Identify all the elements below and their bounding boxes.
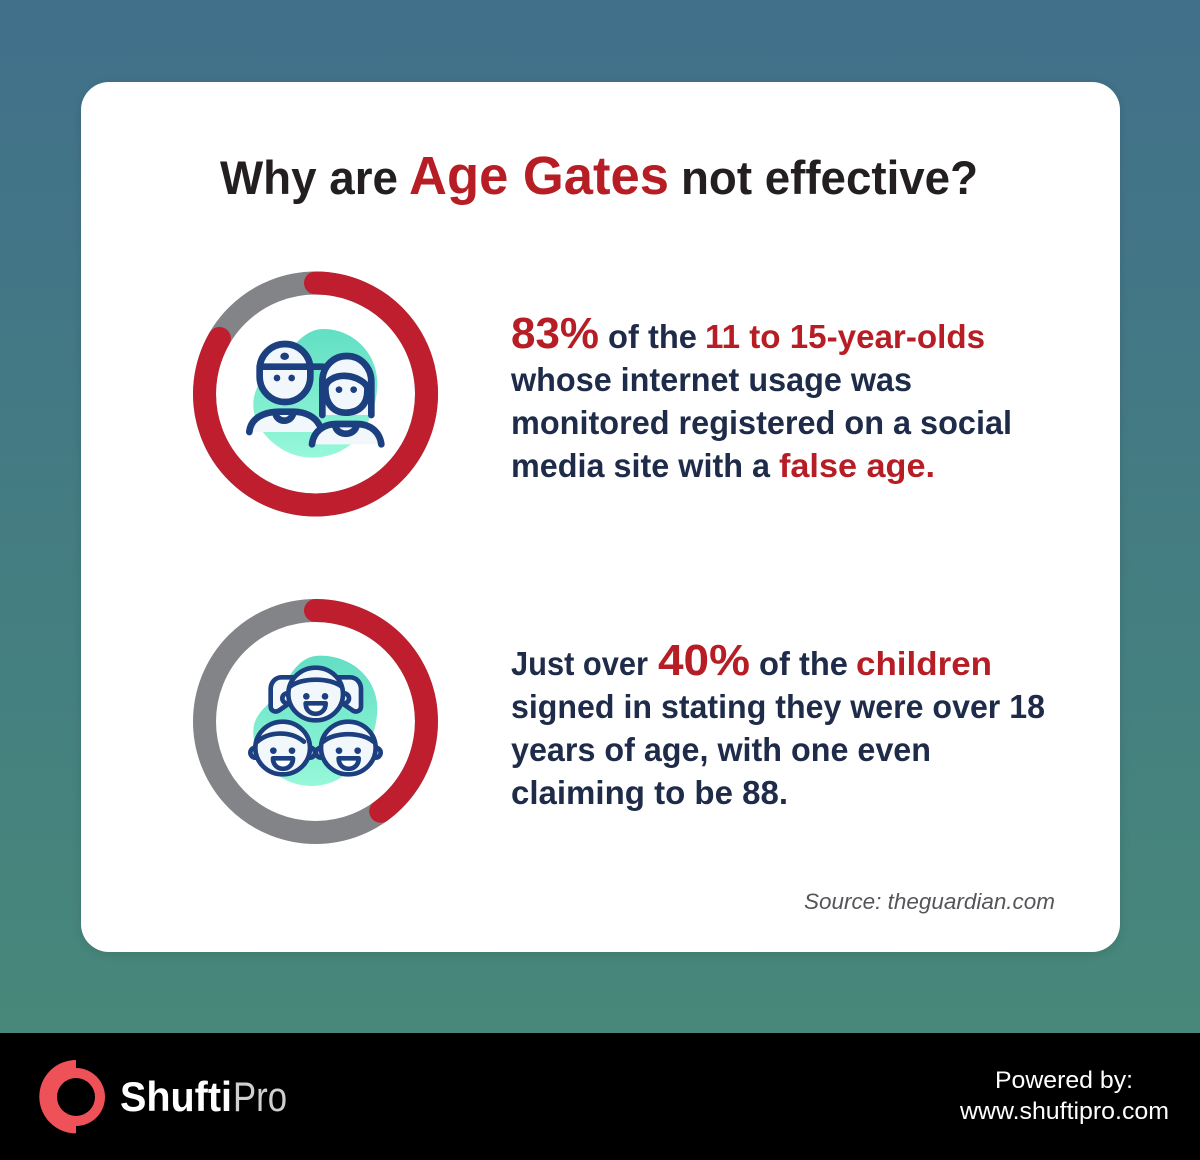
powered by text [959, 1067, 1169, 1125]
title: Why are [220, 151, 398, 204]
statistic text: 83%: 83% [511, 309, 599, 358]
source note: Source: theguardian.com [804, 889, 1055, 914]
statistic text: 40%: of the [759, 645, 848, 682]
donut chart: 40% [204, 610, 426, 832]
statistic text: 40%: years of age, with one even [511, 731, 931, 768]
statistic text: 40%: signed in stating they were over 18 [511, 688, 1045, 725]
statistic text: 40%: 40% [658, 636, 750, 685]
statistic text: 83%: whose internet usage was [510, 361, 912, 398]
donut chart: 83% [204, 283, 427, 505]
footer band [0, 1033, 1200, 1160]
statistic text: 40% [511, 636, 1045, 811]
panel: white card [81, 82, 1120, 952]
powered by text: Powered by: [995, 1067, 1133, 1094]
statistic text: 83%: of the [608, 318, 697, 355]
statistic text: 83%: 11 to 15-year-olds [705, 318, 985, 355]
powered by text: www.shuftipro.com [959, 1098, 1169, 1125]
statistic text: 40%: children [856, 645, 992, 682]
statistic text: 83%: monitored registered on a social [511, 404, 1012, 441]
title: not effective? [681, 151, 978, 204]
statistic text: 83%: false age. [779, 447, 935, 484]
icon: three children [250, 656, 381, 786]
brand name: Shufti [120, 1073, 232, 1120]
statistic text: 83%: media site with a [511, 447, 771, 484]
icon: two teenagers [249, 329, 381, 458]
statistic text: 40%: claiming to be 88. [511, 774, 788, 811]
icon: ShuftiPro logo [39, 1060, 105, 1133]
title: Age Gates [409, 146, 669, 206]
brand name: Pro [233, 1073, 287, 1120]
statistic text: 40%: Just over [511, 645, 648, 682]
statistic text: 83% [510, 309, 1012, 484]
title [220, 146, 978, 206]
